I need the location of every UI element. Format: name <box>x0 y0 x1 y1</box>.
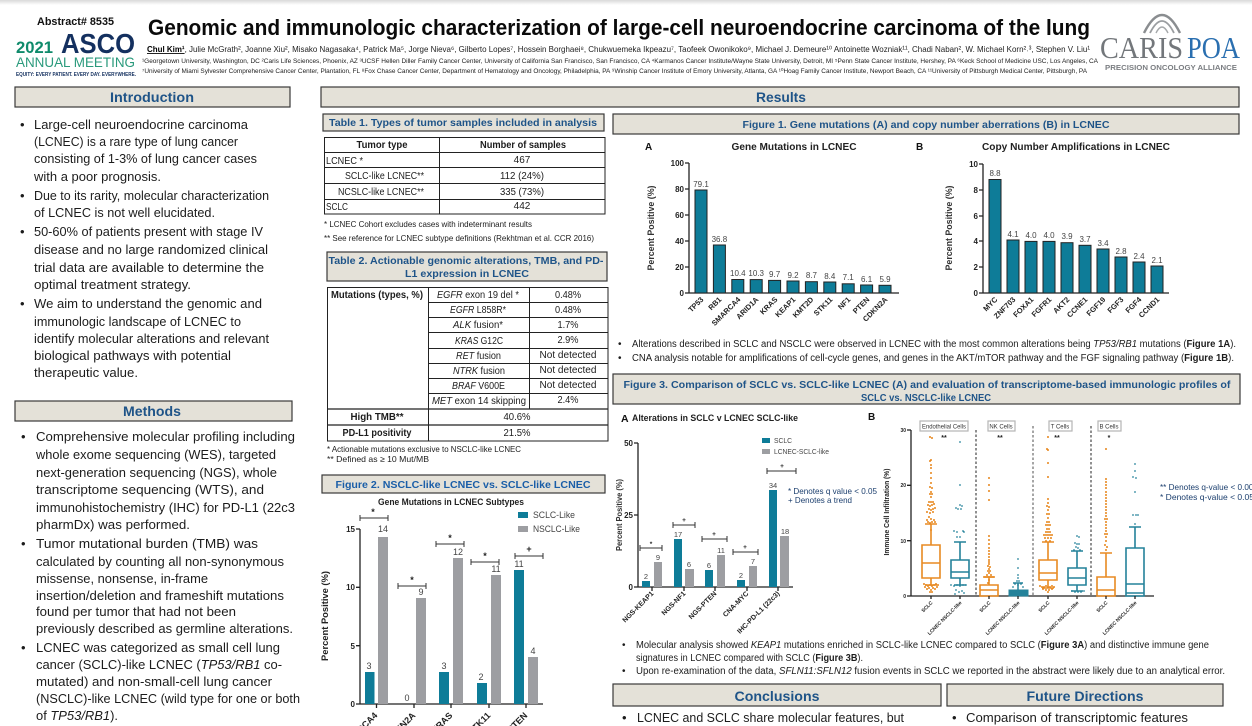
chart: figure 1A gene mutations: 10.3 <box>748 269 765 278</box>
text block: methods bullets: pharmDx) was performed. <box>36 517 190 532</box>
text block: introduction bullets: 50-60% of patients present with stage IV <box>34 224 263 239</box>
table 1: NCSLC-like LCNEC** <box>338 187 424 198</box>
text block: introduction bullets: Large-cell neuroendocrine carcinoma <box>34 117 249 132</box>
panel: introduction <box>15 87 290 380</box>
table 2: RET fusion <box>456 351 501 362</box>
table 1: LCNEC * <box>326 156 363 167</box>
chart: figure 3A alterations: 50 <box>624 439 634 448</box>
table 2: MET exon 14 skipping <box>432 396 526 407</box>
text block: figure 3 findings: Molecular analysis showed KEAP1 mutations enriched in SCLC-like LCNEC compared to SCLC (Figure 3A) and distinctive immune gene <box>636 640 1209 651</box>
legend note: figure 3A significance: * Denotes q value < 0.05 <box>788 486 877 496</box>
chart: figure 2 gene mutations in subtypes: 11 <box>491 564 501 574</box>
table 2: 2.4% <box>558 395 579 406</box>
heading: figure 1: Figure 1. Gene mutations (A) and copy number aberrations (B) in LCNEC <box>742 119 1110 131</box>
heading: conclusions <box>613 684 941 706</box>
text block: figure 1 findings: Alterations described in SCLC and NSCLC were observed in LCNEC with the most common alterations being TP53/RB1 mutations (Figure 1A). <box>632 339 1236 350</box>
chart: figure 1A gene mutations: 100 <box>671 159 685 168</box>
chart: figure 3B immune cell infiltration: 10 <box>900 539 906 545</box>
table 2: 40.6% <box>504 412 531 423</box>
chart: figure 1B copy number amplifications: MYC <box>981 295 1000 313</box>
text block: methods bullets: whole exome sequencing (WES), targeted <box>35 447 276 462</box>
chart: figure 2 gene mutations in subtypes: 4 <box>530 646 536 656</box>
chart: figure 1A gene mutations: 40 <box>675 237 685 246</box>
chart: figure 1A gene mutations <box>645 142 899 328</box>
Caris POA logo: POA <box>1187 30 1241 65</box>
text block: methods bullets: immunohistochemistry (IHC) for PD-L1 (22c3 <box>36 500 295 515</box>
chart: figure 3A alterations: SCLC <box>774 436 793 445</box>
chart: figure 3A alterations: + <box>780 463 784 470</box>
chart: figure 3B immune cell infiltration: LCNEC NSCLC-like <box>1044 600 1081 637</box>
text block: methods bullets: insertion/deletion and frameshift mutations <box>36 588 285 603</box>
text block: figure 1 findings <box>618 339 1236 364</box>
text block: introduction bullets: with a poor prognosis. <box>33 169 161 184</box>
ASCO logo: EQUITY: EVERY PATIENT. EVERY DAY. EVERYWHERE. <box>16 72 137 78</box>
chart: figure 3A alterations: + <box>743 544 747 551</box>
chart: figure 1A gene mutations: 6.1 <box>861 275 873 284</box>
table 1: 112 (24%) <box>500 171 544 182</box>
table 1: 442 <box>514 201 531 212</box>
chart: figure 1A gene mutations: Percent Positive (%) <box>646 186 656 270</box>
chart: figure 3B immune cell infiltration: SCLC <box>979 600 993 614</box>
chart: figure 3B immune cell infiltration: 20 <box>900 483 906 489</box>
chart: figure 1A gene mutations: 7.1 <box>843 273 854 282</box>
chart: figure 2 gene mutations in subtypes: 15 <box>346 525 356 534</box>
chart: figure 3A alterations: 2 <box>644 572 648 581</box>
chart: figure 1A gene mutations: 8.7 <box>806 271 818 280</box>
chart: figure 3B immune cell infiltration: B Cells <box>1099 424 1119 430</box>
affiliations <box>142 58 1099 75</box>
heading: future directions: Future Directions <box>1026 689 1144 704</box>
table 2: Mutations (types, %) <box>331 290 423 301</box>
heading: introduction: Introduction <box>110 90 194 105</box>
chart: figure 1B copy number amplifications: 6 <box>974 212 979 221</box>
table 2 <box>328 288 608 441</box>
chart: figure 1A gene mutations: TP53 <box>686 295 705 314</box>
chart: figure 1B copy number amplifications: 4.1 <box>1007 230 1019 239</box>
chart: figure 3A alterations: IHC-PD-L1 (22c3) <box>736 590 781 636</box>
chart: figure 3A alterations: 11 <box>717 546 725 555</box>
legend note: figure 3A significance: + Denotes a trend <box>788 495 852 505</box>
chart: figure 1B copy number amplifications: Percent Positive (%) <box>944 186 954 270</box>
text block: introduction bullets: • <box>20 296 25 311</box>
chart: figure 2 gene mutations in subtypes: Gene Mutations in LCNEC Subtypes <box>378 497 524 507</box>
chart: figure 2 gene mutations in subtypes: + <box>526 544 532 554</box>
chart: figure 3B immune cell infiltration: 0 <box>903 594 906 600</box>
chart: figure 1B copy number amplifications: CCNE1 <box>1065 295 1089 319</box>
chart: figure 3B immune cell infiltration: * <box>1108 435 1111 442</box>
text block: introduction bullets: optimal treatment strategy. <box>34 277 191 292</box>
table 2: Not detected <box>540 365 596 376</box>
chart: figure 2 gene mutations in subtypes: * <box>371 507 375 517</box>
table 1 footnotes <box>324 219 594 243</box>
chart: figure 1A gene mutations: 10.4 <box>730 269 746 278</box>
chart: figure 1A gene mutations: KEAP1 <box>773 295 797 319</box>
table 1 footnotes: * LCNEC Cohort excludes cases with indeterminant results <box>324 219 532 229</box>
chart: figure 3B immune cell infiltration: SCLC <box>1096 600 1110 614</box>
text block: methods bullets: missense, nonsense, in-frame <box>36 571 208 586</box>
table 1 footnotes: ** See reference for LCNEC subtype definitions (Rekhtman et al. CCR 2016) <box>324 233 594 243</box>
chart: figure 1A gene mutations: 9.2 <box>787 271 799 280</box>
text block: methods bullets: transcriptome sequencing (WTS), and <box>36 482 264 497</box>
table 2: NTRK fusion <box>453 366 505 377</box>
legend note: figure 3A significance <box>788 486 877 505</box>
table 2: EGFR L858R* <box>450 305 506 316</box>
Caris POA logo: CARIS <box>1100 30 1183 65</box>
heading: figure 3 <box>613 374 1240 404</box>
chart: figure 2 gene mutations in subtypes <box>320 497 580 726</box>
text block: introduction bullets: Due to its rarity, molecular characterization <box>34 188 269 203</box>
chart: figure 1A gene mutations: 20 <box>675 263 685 272</box>
chart: figure 1B copy number amplifications: FGF3 <box>1105 295 1125 315</box>
text block: introduction bullets: trial data are available to determine the <box>34 260 264 275</box>
chart: figure 2 gene mutations in subtypes: 9 <box>418 587 424 597</box>
chart: figure 1A gene mutations: PTEN <box>851 295 871 316</box>
chart: figure 1B copy number amplifications: B <box>916 142 923 153</box>
chart: figure 3A alterations: 18 <box>781 527 789 536</box>
text block: figure 1 findings: • <box>618 353 622 364</box>
text block: introduction bullets: • <box>20 224 25 239</box>
text block: future directions: Comparison of transcriptomic features <box>966 710 1188 725</box>
chart: figure 3B immune cell infiltration: NK Cells <box>989 424 1013 430</box>
text block: methods bullets: • <box>21 536 26 551</box>
chart: figure 1B copy number amplifications: ZNF703 <box>992 295 1017 321</box>
text block: conclusions: • <box>622 710 627 725</box>
chart: figure 1B copy number amplifications: 2 <box>974 263 979 272</box>
chart: figure 1B copy number amplifications: FGF4 <box>1123 294 1144 315</box>
text block: introduction bullets: disease and no large randomized clinical <box>34 242 268 257</box>
chart: figure 2 gene mutations in subtypes: 3 <box>366 661 372 671</box>
Caris POA logo: PRECISION ONCOLOGY ALLIANCE <box>1105 63 1237 72</box>
chart: figure 1A gene mutations: ARID1A <box>734 295 761 321</box>
table 2: 0.48% <box>555 305 581 316</box>
chart: figure 3B immune cell infiltration: LCNEC NSCLC-like <box>985 600 1022 637</box>
heading: methods: Methods <box>123 404 181 419</box>
text block: introduction bullets: We aim to understand the genomic and <box>34 296 262 311</box>
text block: methods bullets: (NSCLC)-like LCNEC (wild type for one or both <box>36 691 300 706</box>
table 2: 0.48% <box>555 290 581 301</box>
chart: figure 3A alterations: + <box>712 531 716 538</box>
table 2 footnotes <box>327 444 521 464</box>
chart: figure 1B copy number amplifications: 2.8 <box>1115 247 1127 256</box>
chart: figure 1B copy number amplifications: AKT2 <box>1051 295 1071 315</box>
chart: figure 1A gene mutations: 0 <box>680 289 685 298</box>
text block: figure 3 findings: signatures in LCNEC compared with SCLC (Figure 3B). <box>636 653 863 664</box>
chart: figure 1A gene mutations: A <box>645 142 652 153</box>
text block: methods bullets <box>21 429 300 723</box>
text block: introduction bullets: of LCNEC is not well elucidated. <box>34 205 215 220</box>
chart: figure 3A alterations: NGS-PTEN <box>688 590 718 621</box>
text block: introduction bullets: identify molecular alterations and relevant <box>34 331 269 346</box>
text block: introduction bullets: • <box>20 117 25 132</box>
abstract number: Abstract# 8535 <box>37 16 114 28</box>
chart: figure 1B copy number amplifications: 3.7 <box>1079 235 1091 244</box>
text block: methods bullets: • <box>21 640 26 655</box>
chart: figure 2 gene mutations in subtypes: 5 <box>351 642 356 651</box>
chart: figure 1B copy number amplifications: 4 <box>974 237 979 246</box>
title: Genomic and immunologic characterization of large-cell neuroendocrine carcinoma of the lung <box>148 15 1090 40</box>
text block: figure 3 findings <box>622 640 1225 677</box>
table 2: 21.5% <box>504 428 531 439</box>
chart: figure 2 gene mutations in subtypes: Percent Positive (%) <box>320 571 331 661</box>
text block: methods bullets: Tumor mutational burden (TMB) was <box>36 536 259 551</box>
chart: figure 3B immune cell infiltration: ** <box>941 435 947 442</box>
chart: figure 3A alterations: 17 <box>674 530 682 539</box>
panel: methods <box>15 401 300 723</box>
text block: figure 3 findings: • <box>622 666 626 677</box>
chart: figure 1B copy number amplifications: FOXA1 <box>1011 295 1035 319</box>
chart: figure 1A gene mutations: SMARCA4 <box>710 294 743 328</box>
chart: figure 1A gene mutations: 36.8 <box>712 235 728 244</box>
chart: figure 2 gene mutations in subtypes: NSCLC-Like <box>533 524 580 534</box>
chart: figure 2 gene mutations in subtypes: * <box>483 551 487 561</box>
chart: figure 3A alterations: A <box>621 413 629 425</box>
text block: methods bullets: mutated) and non-small-cell lung cancer <box>36 674 273 689</box>
chart: figure 1A gene mutations: Gene Mutations in LCNEC <box>732 142 856 153</box>
chart: figure 1B copy number amplifications: 8.8 <box>989 169 1001 178</box>
table 1: 467 <box>514 155 531 166</box>
text block: methods bullets: LCNEC was categorized as small cell lung <box>36 640 280 655</box>
ASCO logo <box>16 28 137 78</box>
chart: figure 1B copy number amplifications: 0 <box>974 289 979 298</box>
table 1: SCLC-like LCNEC** <box>345 171 424 182</box>
chart: figure 1A gene mutations: CDKN2A <box>861 295 890 324</box>
heading: figure 3: SCLC vs. NSCLC-like LCNEC <box>861 392 991 404</box>
table 2: Not detected <box>540 350 596 361</box>
panel: future directions <box>947 684 1223 725</box>
heading: table 1 <box>323 114 604 131</box>
heading: introduction <box>15 87 290 107</box>
chart: figure 1B copy number amplifications <box>916 142 1170 321</box>
text block: methods bullets: cancer (SCLC)-like LCNEC (TP53/RB1 co- <box>36 657 282 672</box>
chart: figure 1B copy number amplifications: FGFR1 <box>1030 295 1053 319</box>
chart: figure 1B copy number amplifications: CCND1 <box>1137 295 1161 320</box>
affiliations: ⁷University of Miami Sylvester Comprehensive Cancer Center, Plantation, FL ⁸Fox Chase Cancer Center, Department of Hematology and Oncology, Philadelphia, PA ⁹Winship Cancer Institute of Emory University, Atlanta, GA ¹⁰Hoag Family Cancer Institute, Newport Beach, CA ¹¹University of Pittsburgh Medical Center, Pittsburgh, PA <box>142 68 1088 75</box>
chart: figure 3A alterations: CNA-MYC <box>722 590 750 619</box>
chart: figure 3B immune cell infiltration: ** <box>997 435 1003 442</box>
chart: figure 3B immune cell infiltration <box>868 412 1154 637</box>
chart: figure 1A gene mutations: 5.9 <box>879 275 891 284</box>
table 2 footnotes: ** Defined as ≥ 10 Mut/MB <box>327 454 429 464</box>
table 1: SCLC <box>326 202 348 213</box>
heading: future directions <box>947 684 1223 706</box>
table 2: Not detected <box>540 380 596 391</box>
text block: introduction bullets: therapeutic value. <box>34 365 138 380</box>
table 1 <box>324 138 605 214</box>
text block: methods bullets: Comprehensive molecular profiling including <box>36 429 295 444</box>
chart: figure 1B copy number amplifications: 3.4 <box>1097 239 1109 248</box>
ASCO logo: 2021 <box>16 38 53 57</box>
chart: figure 1B copy number amplifications: 8 <box>974 186 979 195</box>
heading: methods <box>15 401 292 421</box>
heading: results: Results <box>756 90 806 105</box>
heading: results <box>321 87 1239 107</box>
affiliations: ¹Georgetown University, Washington, DC ²Caris Life Sciences, Phoenix, AZ ³UCSF Hellen Diller Family Cancer Center, University of California San Francisco, San Francisco, CA ⁴Karmanos Cancer Institute/Wayne State University, Detroit, MI ⁵Penn State Cancer Institute, Hershey, PA ⁶Keck School of Medicine USC, Los Angeles, CA <box>142 58 1099 65</box>
chart: figure 1A gene mutations: STK11 <box>812 295 834 318</box>
ASCO logo: ASCO <box>61 28 135 59</box>
table 2: 2.9% <box>558 335 579 346</box>
chart: figure 3B immune cell infiltration: SCLC <box>1038 600 1052 614</box>
chart: figure 2 gene mutations in subtypes: 10 <box>346 583 356 592</box>
legend note: figure 3B significance: * Denotes q-value < 0.05 <box>1160 492 1252 502</box>
table 1: Tumor type <box>356 140 408 151</box>
legend note: figure 3B significance <box>1160 482 1252 502</box>
chart: figure 2 gene mutations in subtypes: 0 <box>351 700 356 709</box>
chart: figure 3A alterations: 7 <box>751 557 755 566</box>
chart: figure 1A gene mutations: 80 <box>675 185 685 194</box>
chart: figure 3B immune cell infiltration: Endothelial Cells <box>922 424 966 430</box>
table 2 footnotes: * Actionable mutations exclusive to NSCLC-like LCNEC <box>327 444 521 454</box>
chart: figure 1A gene mutations: KRAS <box>758 295 779 316</box>
chart: figure 3A alterations: Alterations in SCLC v LCNEC SCLC-like <box>632 413 798 423</box>
chart: figure 1B copy number amplifications: Copy Number Amplifications in LCNEC <box>982 142 1170 153</box>
chart: figure 2 gene mutations in subtypes: 0 <box>404 693 410 703</box>
chart: figure 3A alterations: 34 <box>769 481 777 490</box>
chart: figure 3B immune cell infiltration: LCNEC NSCLC-like <box>927 600 964 637</box>
text block: introduction bullets: • <box>20 188 25 203</box>
table 1: 335 (73%) <box>500 187 544 198</box>
chart: figure 2 gene mutations in subtypes: * <box>448 533 452 543</box>
chart: figure 1A gene mutations: KMT2D <box>791 295 816 320</box>
heading: figure 2: Figure 2. NSCLC-like LCNEC vs. SCLC-like LCNEC <box>336 479 591 491</box>
chart: figure 3B immune cell infiltration: 30 <box>900 428 906 434</box>
table 1: Number of samples <box>480 140 566 151</box>
chart: figure 3A alterations: Percent Positive (%) <box>615 479 624 551</box>
text block: introduction bullets: immunologic landscape of LCNEC to <box>34 314 241 329</box>
chart: figure 3A alterations: 6 <box>687 560 691 569</box>
chart: figure 2 gene mutations in subtypes: 3 <box>441 661 447 671</box>
chart: figure 3B immune cell infiltration: ** <box>1054 435 1060 442</box>
chart: figure 3A alterations: NGS-KEAP1 <box>622 590 655 624</box>
ASCO logo: ANNUAL MEETING <box>16 54 135 70</box>
text block: figure 3 findings: • <box>622 640 626 651</box>
text block: methods bullets: of TP53/RB1). <box>36 708 118 723</box>
chart: figure 3A alterations: 0 <box>629 583 634 592</box>
chart: figure 3A alterations: 2 <box>739 571 743 580</box>
text block: methods bullets: previously described as germline alterations. <box>36 621 293 636</box>
text block: figure 1 findings: CNA analysis notable for amplifications of cell-cycle genes, and genes in the AKT/mTOR pathway and the FGF signaling pathway (Figure 1B). <box>632 353 1234 364</box>
chart: figure 2 gene mutations in subtypes: 14 <box>378 524 388 534</box>
text block: figure 1 findings: • <box>618 339 622 350</box>
authors: Chul Kim¹, Julie McGrath², Joanne Xiu², Misako Nagasaka⁴, Patrick Ma⁵, Jorge Nieva⁶, Gilberto Lopes⁷, Hossein Borghaei⁸, Chukwuemeka Ikpeazu⁷, Taofeek Owonikoko⁹, Michael J. Demeure¹⁰ Antoinette Wozniak¹¹, Chadi Naban², W. Michael Korn²˒³, Stephen V. Liu¹ <box>147 44 1090 54</box>
heading: figure 2 <box>322 475 605 493</box>
chart: figure 3A alterations: 9 <box>656 553 660 562</box>
text block: introduction bullets: biological pathways with potential <box>34 348 231 363</box>
heading: table 1: Table 1. Types of tumor samples included in analysis <box>329 117 597 129</box>
text block: introduction bullets <box>20 117 269 380</box>
chart: figure 1A gene mutations: 60 <box>675 211 685 220</box>
chart: figure 2 gene mutations in subtypes: 12 <box>453 547 463 557</box>
table 2: 1.7% <box>558 320 579 331</box>
heading: table 2 <box>327 252 607 281</box>
table 2: KRAS G12C <box>455 336 503 347</box>
text block: future directions: • <box>952 710 957 725</box>
chart: figure 3B immune cell infiltration: B <box>868 412 875 423</box>
chart: figure 1B copy number amplifications: 2.1 <box>1151 256 1163 265</box>
chart: figure 1B copy number amplifications: 4.0 <box>1043 231 1055 240</box>
chart: figure 1A gene mutations: NF1 <box>836 295 852 311</box>
heading: table 2: L1 expression in LCNEC <box>405 268 529 280</box>
chart: figure 3A alterations: LCNEC-SCLC-like <box>774 447 829 456</box>
chart: figure 3A alterations: 6 <box>707 561 711 570</box>
chart: figure 1B copy number amplifications: 2.4 <box>1133 252 1145 261</box>
chart: figure 1B copy number amplifications: 3.9 <box>1061 232 1073 241</box>
chart: figure 3A alterations: NGS-NF1 <box>661 590 687 617</box>
chart: figure 1B copy number amplifications: 4.0 <box>1025 231 1037 240</box>
table 2: EGFR exon 19 del * <box>437 290 519 301</box>
chart: figure 1A gene mutations: 8.4 <box>824 272 836 281</box>
text block: methods bullets: next-generation sequencing (NGS), whole <box>36 465 277 480</box>
chart: figure 3A alterations: * <box>650 541 653 548</box>
text block: methods bullets: calculated by counting all non-synonymous <box>36 554 284 569</box>
chart: figure 3B immune cell infiltration: Immune Cell Infiltration (%) <box>882 468 891 556</box>
heading: figure 1 <box>613 114 1239 134</box>
chart: figure 1B copy number amplifications: 10 <box>969 160 979 169</box>
chart: figure 3A alterations: + <box>682 517 686 524</box>
heading: table 2: Table 2. Actionable genomic alterations, TMB, and PD- <box>328 255 604 267</box>
Caris POA logo <box>1100 15 1241 72</box>
chart: figure 3A alterations: 25 <box>624 511 634 520</box>
chart: figure 2 gene mutations in subtypes: SCLC-Like <box>533 510 575 520</box>
text block: conclusions: LCNEC and SCLC share molecular features, but <box>637 710 904 725</box>
text block: introduction bullets: consisting of 1-3% of lung cancer cases <box>34 151 257 166</box>
text block: methods bullets: found per tumor that had not been <box>36 604 236 619</box>
table 2: High TMB** <box>350 412 404 423</box>
chart: figure 2 gene mutations in subtypes: 11 <box>514 559 524 569</box>
table 2: PD-L1 positivity <box>342 428 412 439</box>
table 2: BRAF V600E <box>452 381 505 392</box>
chart: figure 2 gene mutations in subtypes: * <box>410 575 414 585</box>
chart: figure 1B copy number amplifications: FGF19 <box>1085 295 1107 318</box>
chart: figure 3A alterations <box>615 413 829 636</box>
chart: figure 3B immune cell infiltration: SCLC <box>921 600 935 614</box>
text block: introduction bullets: (LCNEC) is a rare type of lung cancer <box>34 134 239 149</box>
panel: conclusions <box>613 684 941 725</box>
chart: figure 1A gene mutations: 9.7 <box>769 270 781 279</box>
chart: figure 1A gene mutations: 79.1 <box>693 180 709 189</box>
chart: figure 2 gene mutations in subtypes: 2 <box>478 672 484 682</box>
heading: figure 3: Figure 3. Comparison of SCLC vs. SCLC-like LCNEC (A) and evaluation of transcriptome-based immunologic profiles of <box>624 379 1231 391</box>
chart: figure 3B immune cell infiltration: LCNEC NSCLC-like <box>1102 600 1139 637</box>
text block: methods bullets: • <box>21 429 26 444</box>
chart: figure 1A gene mutations: RB1 <box>706 295 723 312</box>
heading: conclusions: Conclusions <box>734 689 820 704</box>
text block: figure 3 findings: Upon re-examination of the data, SFLN11:SFLN12 fusion events in SCLC we reported in the abstract were likely due to an analytical error. <box>636 666 1225 677</box>
chart: figure 3B immune cell infiltration: T Cells <box>1051 424 1069 430</box>
table 2: ALK fusion* <box>452 320 503 331</box>
